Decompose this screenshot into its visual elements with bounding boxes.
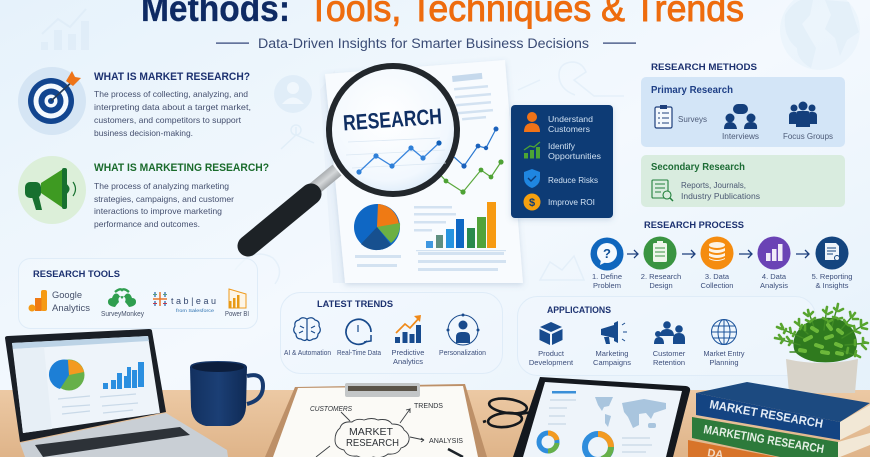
step 3 data collection: 3. Data (705, 272, 730, 281)
bar chart (426, 202, 496, 248)
label: customer retention (653, 349, 686, 367)
icon: globe (712, 320, 736, 344)
book: orange (688, 440, 777, 457)
step 4 data analysis (758, 236, 790, 290)
icon: target (18, 67, 86, 135)
label: surveys: Surveys (678, 115, 707, 124)
subtitle: Data-Driven Insights for Smarter Business Decisions (258, 36, 589, 51)
heading: WHAT IS MARKET RESEARCH? (94, 71, 250, 83)
arrow (796, 250, 809, 258)
icon: interviews (724, 104, 757, 129)
desk (0, 390, 870, 457)
label: marketing campaigns: Marketing (596, 349, 628, 358)
description: interpreting data about a target market, (94, 102, 251, 112)
benefit text: understand customers: Understand (548, 114, 593, 124)
icon: customer group (654, 321, 685, 344)
label: market entry planning (704, 349, 745, 367)
panel: research tools (18, 258, 258, 328)
benefit text: identify opportunities (548, 141, 601, 161)
mind map text (310, 403, 463, 449)
label: product development (529, 349, 574, 367)
tablet donut small (539, 433, 557, 451)
description: The process of analyzing marketing (94, 181, 229, 191)
logo: power bi: Power BI (225, 311, 249, 318)
arrow (627, 250, 638, 258)
mind map text: TRENDS (414, 403, 443, 410)
logo: tableau: tab|eau (171, 296, 216, 306)
step 3 data collection (700, 236, 734, 290)
eyeglasses (483, 396, 532, 429)
mind map cloud and arrows (316, 409, 424, 457)
heading: Primary Research (651, 85, 733, 96)
label: product development: Product (538, 349, 565, 358)
benefit text: identify opportunities: Opportunities (548, 151, 601, 161)
label: predictive analytics: Predictive (392, 348, 424, 357)
description (94, 181, 234, 229)
step 2 research design: Design (649, 281, 673, 290)
icon: product box (540, 322, 562, 345)
label: predictive analytics (392, 348, 424, 366)
book: market research: MARKET RESEARCH (708, 397, 824, 431)
step 1 define problem: 1. Define (592, 272, 622, 281)
icon: real-time clock (346, 319, 371, 344)
pen (448, 449, 463, 457)
step 3 data collection: Collection (701, 281, 733, 290)
heading: LATEST TRENDS (317, 299, 393, 310)
step 1 define problem (590, 238, 624, 290)
mind map text: ANALYSIS (429, 438, 463, 445)
lens word: RESEARCH (342, 104, 443, 135)
mind map text: CUSTOMERS (310, 406, 352, 413)
plant pot (786, 359, 858, 393)
description: Reports, Journals, (681, 181, 746, 190)
clip (345, 383, 420, 397)
logo: google analytics: Google (52, 290, 82, 301)
description (681, 181, 760, 201)
icon: focus groups (789, 102, 817, 127)
logo: surveymonkey (101, 289, 144, 318)
tablet (513, 377, 690, 457)
book: market research (696, 382, 870, 440)
magnifying glass (248, 66, 457, 246)
description: The process of collecting, analyzing, and (94, 89, 248, 99)
report papers with charts (320, 60, 523, 283)
heading: RESEARCH PROCESS (644, 220, 744, 231)
step 5 reporting and insights: & Insights (816, 281, 849, 290)
icon: report search (652, 180, 673, 201)
clipboard mind map (265, 383, 487, 457)
label: personalization: Personalization (439, 348, 486, 357)
icon: dollar: $ (529, 197, 535, 209)
label: focus groups: Focus Groups (783, 132, 833, 141)
logo: tableau (153, 292, 216, 313)
laptop bar chart (103, 362, 144, 389)
panel: secondary research (641, 155, 845, 207)
label: real-time data: Real-Time Data (337, 348, 382, 357)
panel: benefits (511, 105, 613, 218)
icon: clipboard (655, 105, 672, 128)
line chart outside lens (415, 126, 504, 195)
icon: customer (524, 112, 540, 132)
logo: power bi (225, 289, 249, 318)
heading: APPLICATIONS (547, 305, 611, 316)
tablet donut large (585, 434, 611, 457)
icon: growth chart (524, 142, 540, 158)
description: interactions to improve marketing (94, 206, 222, 216)
logo: surveymonkey: SurveyMonkey (101, 311, 144, 318)
logo: google analytics (28, 290, 90, 314)
icon: marketing megaphone (601, 321, 627, 344)
potted plant (775, 304, 868, 393)
label: market entry planning: Market Entry (704, 349, 745, 358)
icon: megaphone (18, 156, 86, 224)
benefit text: understand customers: Customers (548, 124, 590, 134)
step 5 reporting and insights: 5. Reporting (812, 272, 852, 281)
arrow (739, 250, 752, 258)
mind map text: MARKET (349, 426, 394, 438)
description: business decision-making. (94, 128, 193, 138)
panel: primary research (641, 77, 845, 147)
mind map text: RESEARCH (346, 437, 399, 449)
benefit text: reduce risks: Reduce Risks (548, 175, 598, 185)
heading: WHAT IS MARKETING RESEARCH? (94, 162, 269, 174)
label: product development: Development (529, 358, 574, 367)
label: marketing campaigns: Campaigns (593, 358, 631, 367)
panel: what is market research (18, 67, 251, 138)
heading: Secondary Research (651, 162, 745, 173)
plant foliage (775, 304, 868, 362)
step 1 define problem: Problem (593, 281, 621, 290)
description: performance and outcomes. (94, 219, 200, 229)
step 4 data analysis: 4. Data (762, 272, 787, 281)
label: customer retention: Customer (653, 349, 686, 358)
description (94, 89, 251, 138)
label: marketing campaigns (593, 349, 631, 367)
logo: google analytics: Analytics (52, 303, 90, 314)
label: market entry planning: Planning (709, 358, 739, 367)
lens line chart (346, 138, 446, 175)
heading: research methods: RESEARCH METHODS (651, 62, 757, 73)
label: ai and automation: AI & Automation (284, 348, 331, 357)
panel: applications (518, 296, 816, 376)
pie chart (354, 204, 400, 250)
step 5 reporting and insights (812, 236, 852, 290)
icon: shield (524, 169, 540, 188)
coffee mug (190, 361, 263, 426)
laptop (5, 329, 228, 457)
panel: research process (590, 220, 852, 290)
benefit text: understand customers (548, 114, 593, 134)
icon: personalization (446, 314, 480, 345)
heading: RESEARCH TOOLS (33, 269, 120, 280)
step 4 data analysis: Analysis (760, 281, 788, 290)
laptop pie chart (49, 359, 84, 390)
step 2 research design: 2. Research (641, 272, 681, 281)
label: interviews: Interviews (722, 132, 759, 141)
label: predictive analytics: Analytics (393, 357, 423, 366)
logo: tableau: from Salesforce (176, 308, 215, 313)
icon: ai brain (294, 318, 320, 340)
lens (329, 66, 457, 194)
benefit text: identify opportunities: Identify (548, 141, 576, 151)
benefit text: improve roi: Improve ROI (548, 197, 595, 207)
panel: latest trends (280, 292, 502, 374)
icon: predictive chart (395, 315, 421, 343)
arrow (682, 250, 695, 258)
book stack (688, 382, 870, 457)
step 1 define problem: ? (603, 246, 611, 261)
faint background decorations (41, 0, 860, 284)
world map (595, 397, 666, 428)
description: Industry Publications (681, 192, 760, 201)
panel: what is marketing research (18, 156, 269, 229)
description: strategies, campaigns, and customer (94, 194, 234, 204)
step 2 research design (641, 236, 681, 290)
description: customers, and competitors to support (94, 115, 242, 125)
handle (248, 170, 337, 246)
label: customer retention: Retention (653, 358, 685, 367)
